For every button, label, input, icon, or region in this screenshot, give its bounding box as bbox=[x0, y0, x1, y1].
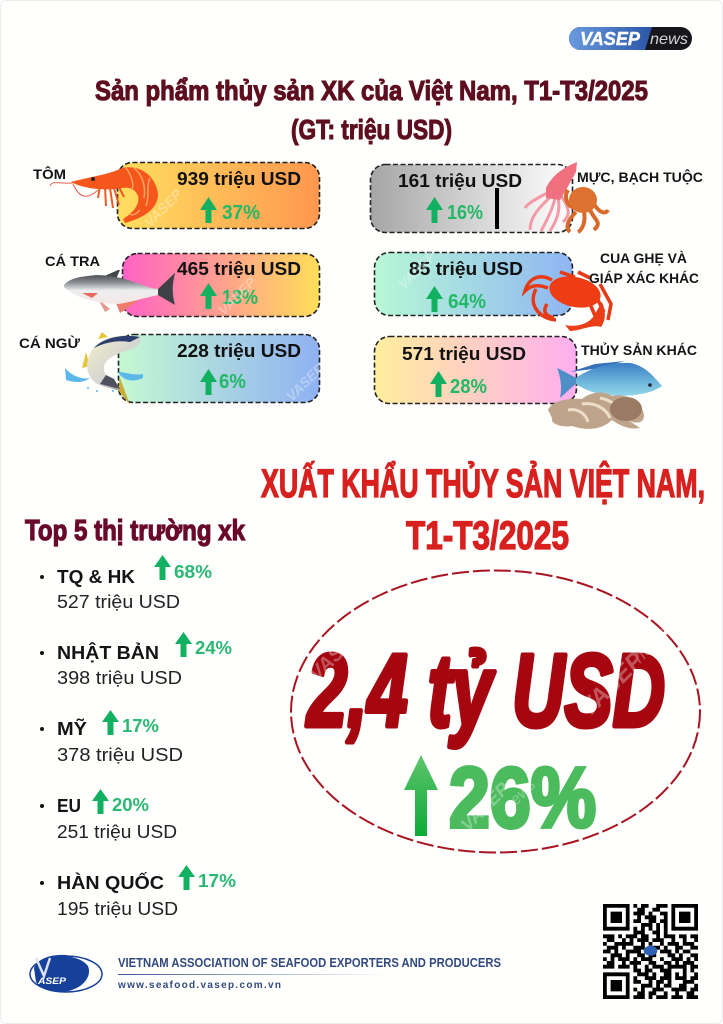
watermarks: VASEP bbox=[215, 274, 259, 318]
dashed ellipse bbox=[291, 570, 700, 852]
market: Nhật Bản: 398 triệu USD bbox=[57, 668, 182, 688]
callout: total export value bbox=[291, 570, 700, 852]
market: Hàn Quốc: 17% bbox=[198, 871, 236, 891]
heading: xuất khẩu thủy sản bbox=[261, 459, 705, 558]
title: (GT: triệu USD) bbox=[291, 114, 452, 145]
panel: cá ngừ bbox=[118, 334, 320, 402]
growth percentage: 26% bbox=[449, 751, 596, 846]
watermarks: VASEP bbox=[141, 186, 185, 230]
market: EU: 20% bbox=[112, 795, 149, 815]
watermarks: VASEP bbox=[395, 248, 439, 292]
panel: thủy sản khác: 28% bbox=[450, 376, 487, 398]
logo: VASEP association bbox=[30, 955, 102, 992]
logo: VASEP association: ASEP bbox=[37, 976, 67, 986]
panel: cá tra: 465 triệu USD bbox=[177, 259, 301, 279]
logo: VASEP news pill: news bbox=[650, 31, 688, 48]
panel: tôm bbox=[118, 162, 320, 228]
title bbox=[95, 75, 648, 145]
panel: cua ghẹ: 85 triệu USD bbox=[409, 259, 523, 279]
market: EU bbox=[40, 789, 177, 842]
panel: tôm: 939 triệu USD bbox=[177, 169, 301, 189]
market: Hàn Quốc bbox=[40, 865, 236, 919]
logo: VASEP news pill bbox=[569, 27, 692, 50]
icon: crab bbox=[525, 272, 611, 331]
watermarks: VASEP bbox=[283, 360, 327, 404]
title: Sản phẩm thủy sản XK của Việt Nam, T1-T3/2025 bbox=[95, 75, 648, 106]
label: cá tra: CÁ TRA bbox=[45, 253, 100, 269]
label: tôm: TÔM bbox=[33, 165, 66, 182]
heading: xuất khẩu thủy sản: T1-T3/2025 bbox=[406, 514, 569, 558]
label: cua ghẹ và giáp xác khác: GIÁP XÁC KHÁC bbox=[589, 270, 699, 286]
market: Mỹ bbox=[40, 710, 183, 765]
growth arrow bbox=[404, 755, 438, 836]
market: Nhật Bản: NHẬT BẢN bbox=[57, 642, 159, 663]
label: cá ngừ: CÁ NGỪ bbox=[19, 334, 80, 351]
market: Mỹ: MỸ bbox=[57, 718, 87, 739]
market: Mỹ: 378 triệu USD bbox=[57, 745, 183, 765]
watermarks: news bbox=[501, 776, 539, 815]
icon: shellfish bbox=[548, 392, 644, 429]
watermarks bbox=[141, 186, 673, 835]
panel: cua ghẹ: 64% bbox=[448, 291, 486, 313]
panel: mực, bạch tuộc bbox=[370, 164, 572, 232]
watermarks: VASEP bbox=[305, 623, 368, 686]
icon: shrimp bbox=[50, 167, 158, 223]
market: TQ & HK: 68% bbox=[174, 562, 212, 582]
market: Hàn Quốc: HÀN QUỐC bbox=[57, 872, 164, 893]
watermarks: news bbox=[629, 623, 673, 667]
market: Nhật Bản bbox=[40, 632, 232, 688]
icon: octopus bbox=[566, 187, 608, 232]
footer: association name: www.seafood.vasep.com.vn bbox=[117, 980, 281, 991]
footer: association name: VIETNAM ASSOCIATION OF SEAFOOD EXPORTERS AND PRODUCERS bbox=[118, 956, 501, 970]
panel: cá ngừ: 6% bbox=[219, 371, 246, 393]
watermarks: VASEP bbox=[457, 778, 514, 835]
panel: thủy sản khác bbox=[374, 336, 576, 404]
label: thủy sản khác: THỦY SẢN KHÁC bbox=[581, 341, 697, 358]
icon: squid bbox=[525, 162, 577, 231]
market: Hàn Quốc: 195 triệu USD bbox=[57, 899, 178, 919]
label: mực, bạch tuộc: MỰC, BẠCH TUỘC bbox=[577, 168, 703, 185]
logo: VASEP news pill: VASEP bbox=[580, 29, 641, 49]
market: TQ & HK: TQ & HK bbox=[57, 567, 135, 587]
panel: thủy sản khác: 571 triệu USD bbox=[402, 344, 526, 364]
market: Mỹ: 17% bbox=[122, 716, 159, 736]
market: EU: EU bbox=[57, 796, 81, 816]
icon: blue fish bbox=[557, 361, 662, 398]
watermarks: VASEP bbox=[574, 646, 650, 722]
footer: association name bbox=[117, 956, 501, 991]
label: cua ghẹ và giáp xác khác: CUA GHẸ VÀ bbox=[600, 250, 687, 266]
panel: mực, bạch tuộc: 161 triệu USD bbox=[398, 171, 522, 191]
QR code bbox=[603, 906, 698, 997]
panel: cá tra: 13% bbox=[222, 287, 258, 309]
panel: cá tra bbox=[122, 254, 320, 316]
market: Nhật Bản: 24% bbox=[195, 638, 232, 658]
market: EU: 251 triệu USD bbox=[57, 822, 177, 842]
icon: tuna with splash bbox=[65, 332, 143, 405]
label: cua ghẹ và giáp xác khác bbox=[589, 250, 699, 286]
panel: cua ghẹ bbox=[374, 252, 572, 316]
heading: top 5 markets: Top 5 thị trường xk bbox=[25, 515, 246, 547]
panel: mực, bạch tuộc: 16% bbox=[447, 202, 483, 224]
market: TQ & HK bbox=[40, 555, 212, 612]
icon: pangasius fish bbox=[64, 270, 175, 313]
market: TQ & HK: 527 triệu USD bbox=[57, 592, 180, 612]
panel: tôm: 37% bbox=[222, 202, 260, 224]
panel: cá ngừ: 228 triệu USD bbox=[177, 341, 301, 361]
